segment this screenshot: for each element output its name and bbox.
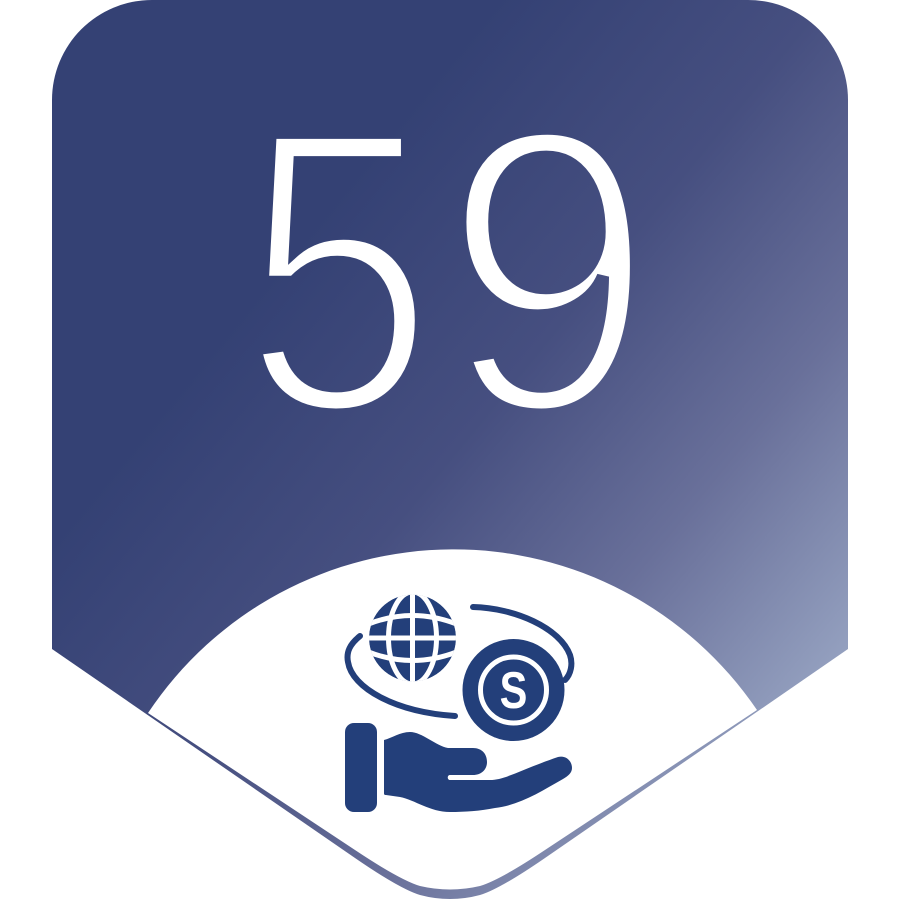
panel: white lower cap <box>148 549 757 890</box>
icon: coin <box>462 639 564 741</box>
icon: hand <box>384 732 572 812</box>
number 59: 9 <box>442 45 654 498</box>
icon: globe, coin and hand <box>345 590 572 812</box>
icon: globe <box>369 594 456 682</box>
icon: orbit <box>348 607 571 716</box>
number 59 <box>242 44 654 498</box>
icon: coin: S <box>500 661 527 719</box>
icon: cuff <box>345 723 377 812</box>
number 59: 5 <box>242 44 435 497</box>
